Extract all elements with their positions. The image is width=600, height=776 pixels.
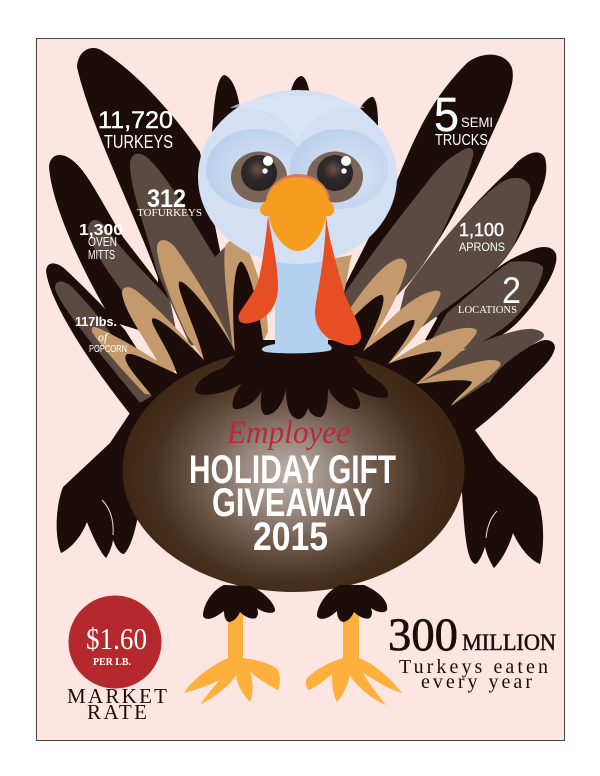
title: 2015 (253, 515, 328, 559)
head tufts (212, 75, 378, 132)
left wattle (238, 216, 278, 323)
title: GIVEAWAY (212, 481, 373, 525)
turkey illustration (46, 48, 556, 705)
market rate label (67, 684, 167, 724)
market rate badge (68, 596, 162, 688)
title: Employee (226, 415, 350, 451)
market rate badge: PER LB. (93, 656, 131, 668)
stat: 5 semi trucks: 5 (434, 89, 459, 142)
stat: 312 tofurkeys: TOFURKEYS (137, 207, 202, 219)
stat: 1,300 oven mitts: MITTS (88, 247, 115, 262)
stat: 1,100 aprons: 1,100 (459, 220, 504, 240)
head (198, 90, 397, 264)
stat: 117 lbs of popcorn: POPCORN (89, 344, 127, 355)
right eye socket (290, 129, 388, 209)
market rate badge: $1.60 (86, 621, 147, 656)
stat: 312 tofurkeys: 312 (147, 185, 186, 213)
stat: 5 semi trucks: SEMI (461, 114, 493, 130)
left tail feathers (46, 48, 238, 414)
stat: 117 lbs of popcorn (75, 315, 127, 355)
leg tufts (203, 585, 387, 622)
wing highlights (102, 500, 497, 538)
stat: 1,100 aprons: APRONS (459, 240, 505, 254)
neck ruffle (195, 340, 388, 419)
stat: 312 tofurkeys (137, 185, 202, 219)
market rate label: MARKET (67, 684, 167, 708)
beak (260, 174, 334, 251)
stat: 1,300 oven mitts: OVEN (88, 234, 117, 249)
stat: 11,720 turkeys (98, 107, 173, 152)
left eye (231, 152, 287, 202)
stat: 5 semi trucks: TRUCKS (435, 132, 488, 149)
stat: 11,720 turkeys: TURKEYS (104, 132, 173, 152)
stat: 1,100 aprons (459, 220, 505, 254)
stat: 1,300 oven mitts: 1,300 (79, 222, 123, 239)
left eye socket (206, 129, 306, 209)
wings and dark plumage base (57, 262, 543, 568)
stat: 300 million turkeys eaten every year: every year (421, 671, 532, 693)
stat: 300 million turkeys eaten every year: 300 (388, 609, 458, 661)
stat: 2 locations (458, 270, 521, 316)
stat: 300 million turkeys eaten every year: Turkeys eaten (399, 656, 548, 678)
stat: 5 semi trucks (434, 89, 493, 149)
stat: 117 lbs of popcorn: 117lbs. (75, 315, 117, 329)
title: HOLIDAY GIFT (189, 448, 396, 492)
stat: 117 lbs of popcorn: of (98, 330, 109, 344)
right wattle (315, 216, 361, 345)
tan feather bands (92, 240, 501, 406)
page background panel (36, 38, 564, 740)
market rate label: RATE (87, 700, 147, 724)
title (189, 415, 396, 559)
stat: 300 million turkeys eaten every year (388, 609, 556, 693)
body (122, 348, 464, 592)
stat: 300 million turkeys eaten every year: MILLION (462, 630, 556, 655)
stat: 11,720 turkeys: 11,720 (98, 107, 173, 134)
stat: 2 locations: 2 (502, 270, 521, 311)
stat: 2 locations: LOCATIONS (458, 304, 517, 316)
right eye (307, 152, 363, 202)
right tail feathers (340, 55, 556, 430)
neck (262, 250, 332, 353)
stat: 1,300 oven mitts (79, 222, 123, 262)
legs and feet (184, 612, 402, 705)
